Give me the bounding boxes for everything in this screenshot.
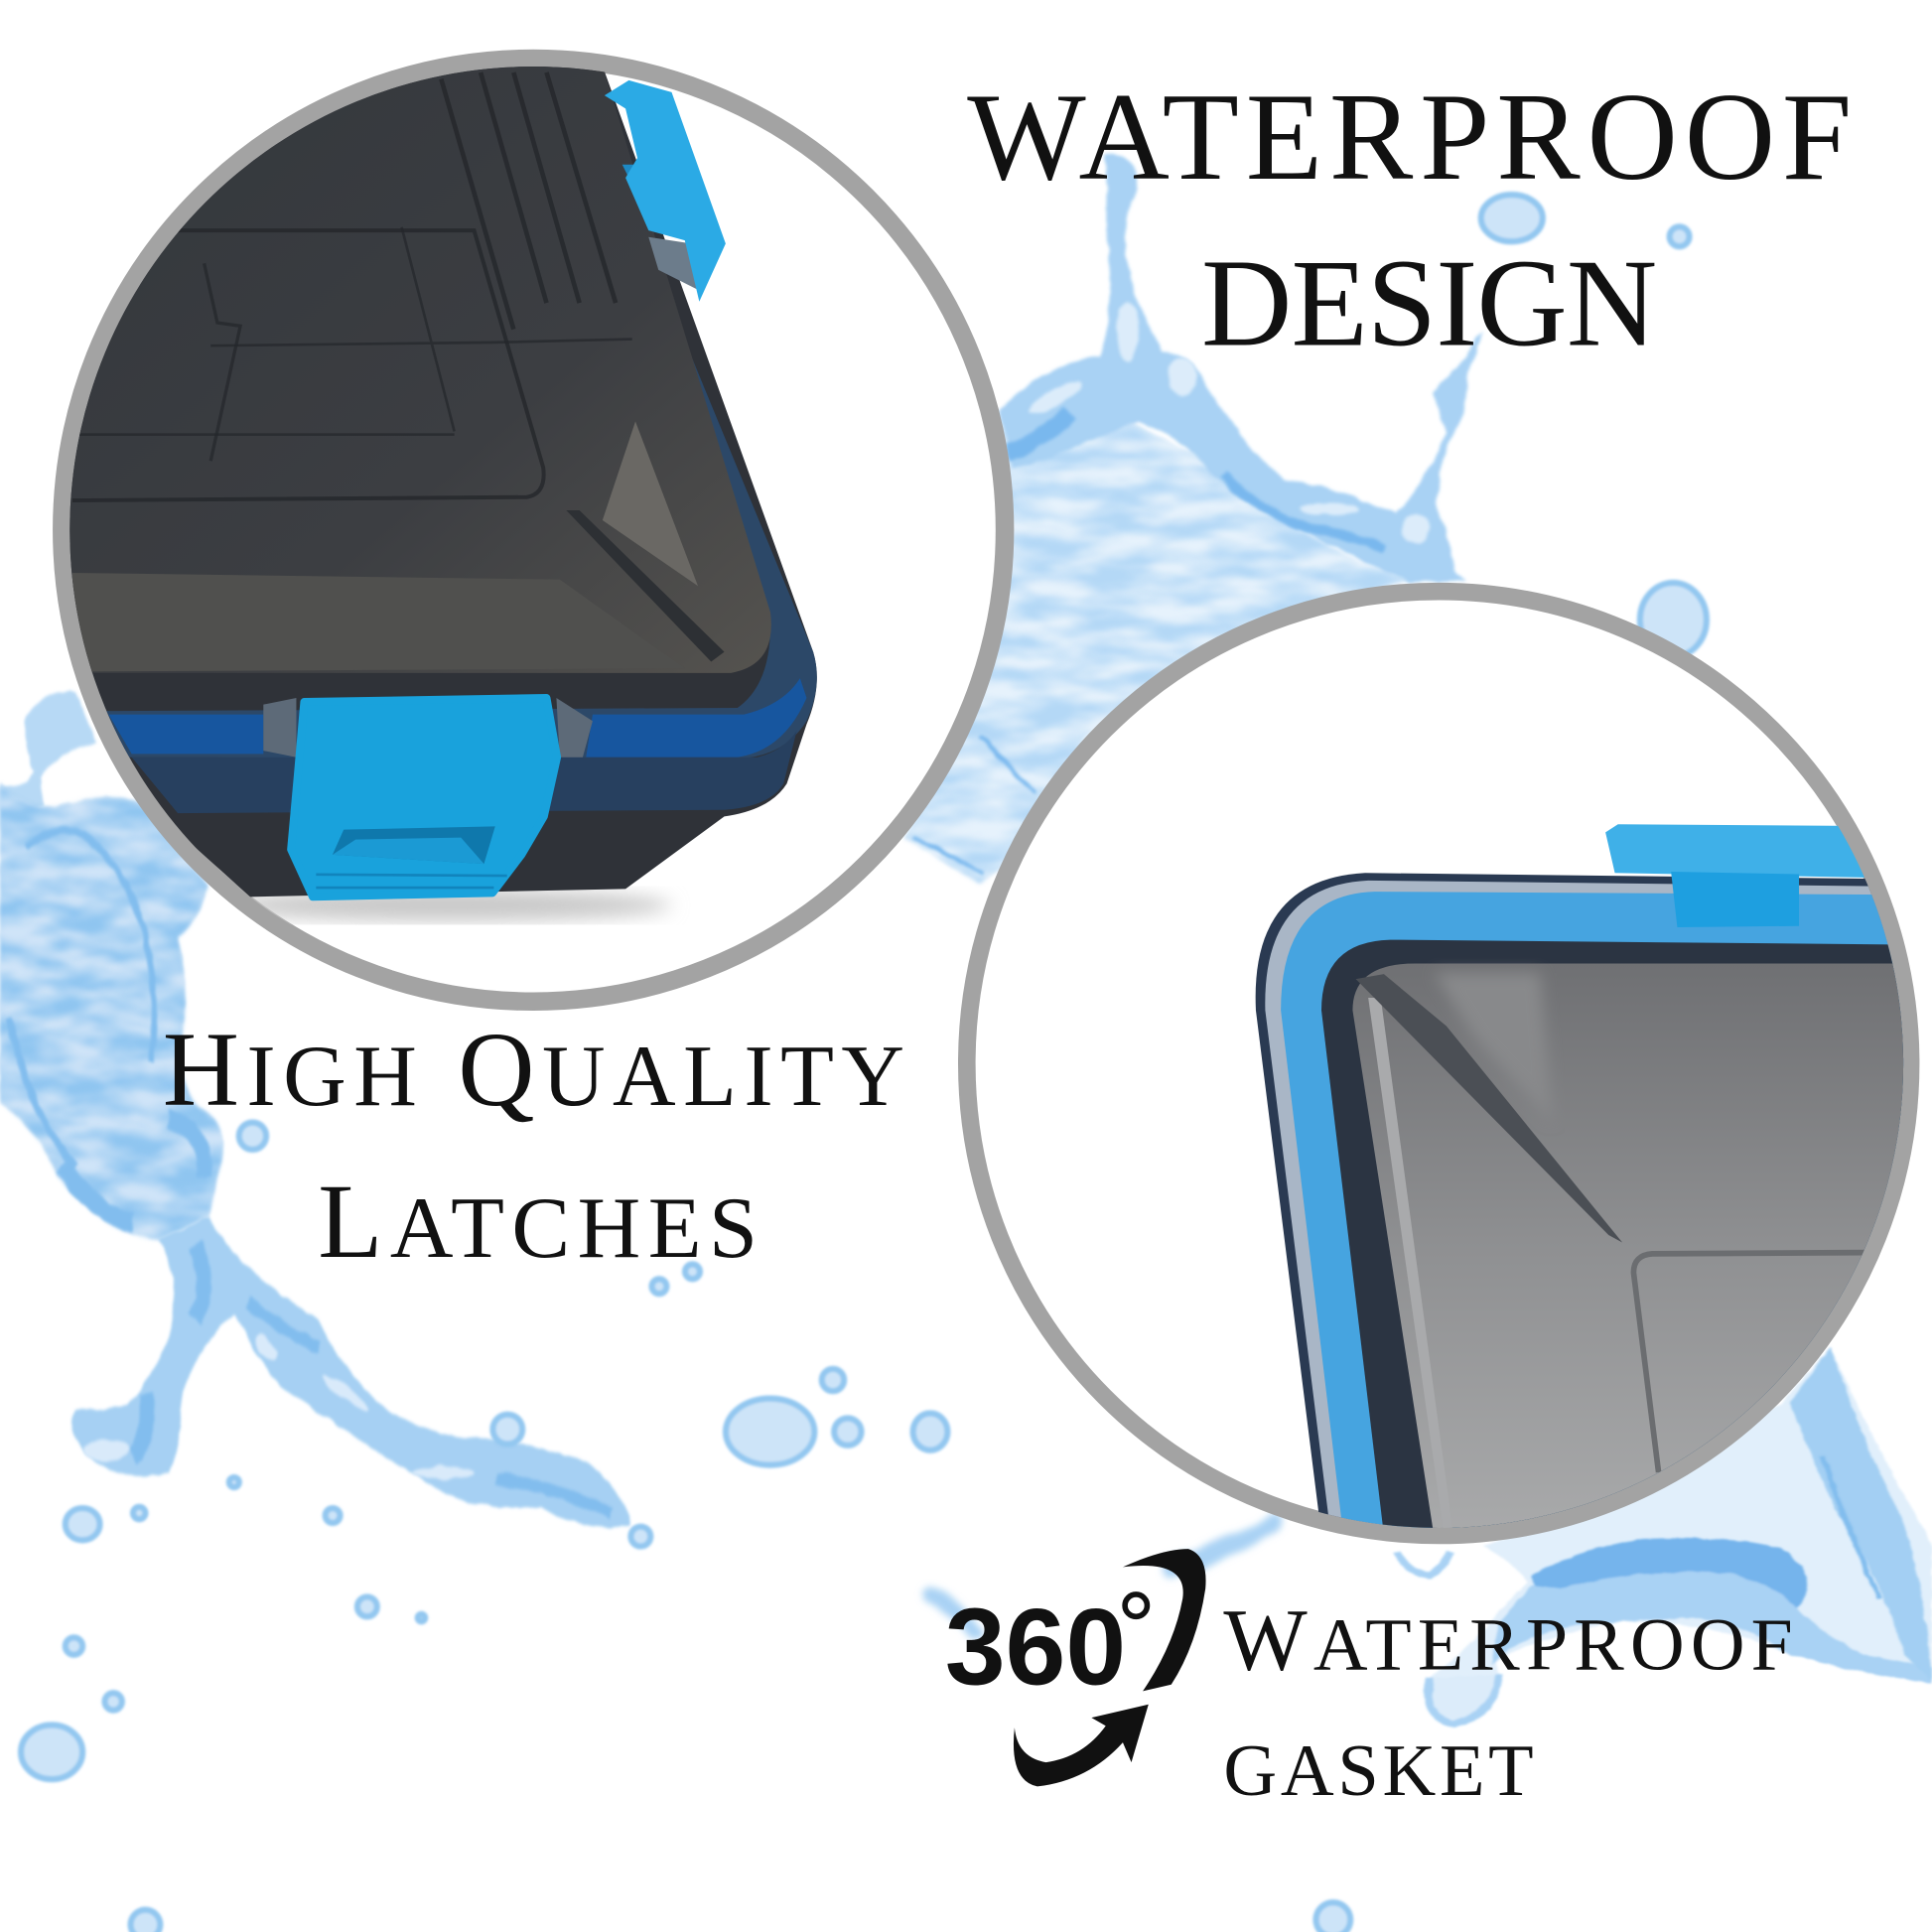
splash: left swirl and stream: [0, 691, 629, 1528]
interior upper panel: [1438, 963, 1547, 1098]
hinge stubs: [263, 698, 593, 758]
diagonal rib: [566, 510, 725, 662]
heading: waterproof gasket: [1223, 1591, 1799, 1812]
panel: high quality latches photo circle: [40, 59, 1005, 1002]
lid details: [72, 72, 632, 500]
splash: droplets: [21, 195, 1707, 1932]
lid corner triangle: [603, 421, 698, 586]
icon: top latch: [605, 80, 726, 302]
icon: gasket latch: [1605, 824, 1889, 927]
heading: high quality latches: LATCHES: [318, 1164, 764, 1281]
splash: upper centre: [903, 154, 1483, 884]
inner tray outline: [1633, 1253, 1864, 1472]
icon: front latch: [291, 698, 557, 897]
diagonal rib: [1356, 974, 1622, 1243]
heading: waterproof gasket: WATERPROOF: [1223, 1591, 1799, 1690]
icon: 360 degree rotation: 360: [945, 1587, 1126, 1709]
lid lower panel: [72, 573, 572, 671]
box shadow: [223, 890, 671, 921]
splash: side streams: [932, 1522, 1276, 1632]
blue gasket: [1281, 892, 1914, 1535]
inner dark edge: [1321, 940, 1914, 1535]
splash: lower right: [1397, 1347, 1932, 1725]
title: waterproof design: [967, 68, 1852, 372]
navy lower rim: [132, 731, 797, 813]
heading: high quality latches: HIGH QUALITY: [163, 1012, 912, 1129]
heading: waterproof gasket: GASKET: [1223, 1730, 1537, 1812]
title: waterproof design: DESIGN: [1201, 233, 1657, 373]
interior light stripe: [1368, 998, 1452, 1529]
blue rim: [106, 359, 817, 758]
pale gasket edge: [1265, 881, 1914, 1535]
smoky interior: [1352, 963, 1914, 1535]
icon: 360 degree rotation: [945, 1549, 1206, 1786]
smoky lid: [66, 66, 771, 673]
title: waterproof design: WATERPROOF: [967, 68, 1852, 207]
outer dark edge: [1256, 873, 1914, 1535]
panel: waterproof gasket photo circle: [967, 592, 1914, 1535]
bright blue seal: [108, 678, 806, 758]
box silhouette: [40, 66, 817, 897]
heading: high quality latches: [163, 1012, 912, 1281]
